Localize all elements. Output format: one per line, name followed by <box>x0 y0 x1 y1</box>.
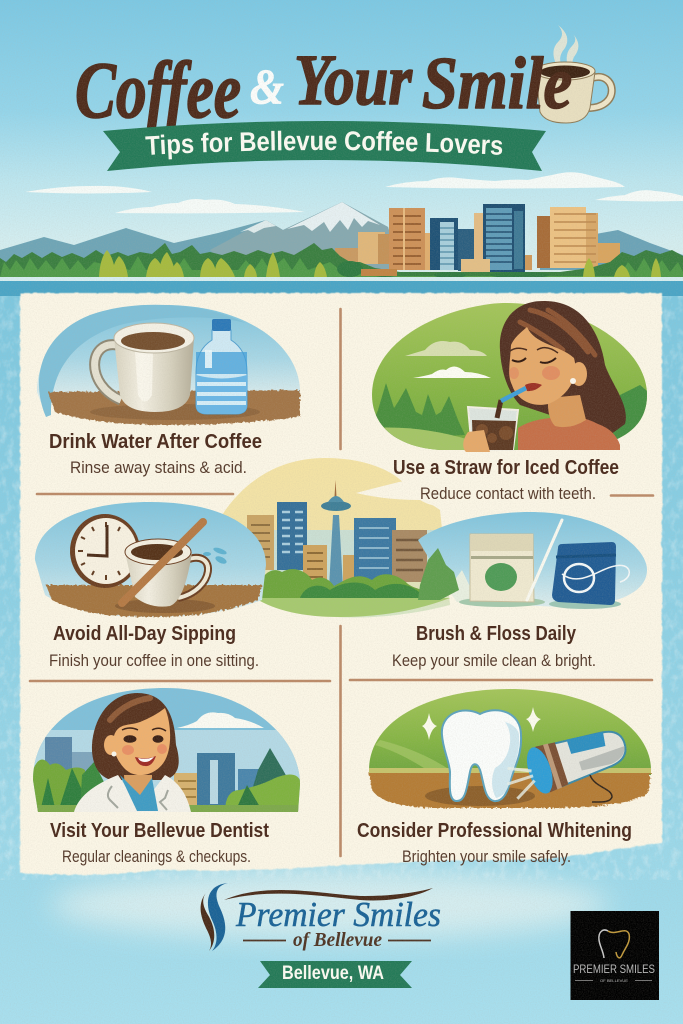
image: straw <box>372 298 652 455</box>
logo: Premier Smiles <box>201 883 441 951</box>
icon: toothpick <box>527 520 562 600</box>
icon: floss box <box>552 542 629 605</box>
image: whitening <box>365 685 655 808</box>
icon: coffee mug <box>95 323 194 412</box>
bushes <box>257 569 440 598</box>
ribbon: location <box>258 961 412 988</box>
heading: dentist: Visit Your Bellevue Dentist <box>50 820 269 842</box>
icon: iced coffee <box>463 388 526 452</box>
figure: woman with straw <box>500 301 626 450</box>
icon: coffee cup <box>535 25 612 123</box>
title: Your <box>294 40 413 120</box>
title: & <box>250 58 284 114</box>
heading: brush: Brush & Floss Daily <box>416 623 577 645</box>
dividers <box>30 309 653 856</box>
figure: dentist <box>74 693 191 812</box>
heading: straw: Use a Straw for Iced Coffee <box>393 457 619 479</box>
icon: device cord <box>590 775 612 802</box>
text: drink water: Rinse away stains & acid. <box>70 458 247 477</box>
icon: whitening pack <box>470 534 534 602</box>
city skyline <box>335 204 620 273</box>
panel <box>20 293 662 875</box>
heading: drink water: Drink Water After Coffee <box>49 431 262 453</box>
heading: clock: Avoid All-Day Sipping <box>53 623 236 645</box>
text: whitening: Brighten your smile safely. <box>402 847 571 866</box>
icon: sparkles <box>422 707 541 740</box>
buildings right <box>343 518 427 588</box>
image: dentist <box>30 685 305 815</box>
tree line <box>0 243 683 278</box>
title: Smile <box>422 43 572 125</box>
text: straw: Reduce contact with teeth. <box>420 484 596 503</box>
icon: tooth outline <box>599 930 629 958</box>
title: Coffee <box>75 47 241 135</box>
image: skyline <box>222 458 475 618</box>
icon: clock <box>70 514 140 588</box>
ribbon: location: Bellevue, WA <box>282 963 384 984</box>
logo: Premier Smiles: Premier Smiles <box>235 895 441 934</box>
icon: logo swoosh <box>201 883 433 951</box>
badge: Premier Smiles black logo: OF BELLEVUE <box>600 978 628 983</box>
logo: Premier Smiles: of Bellevue <box>293 929 382 951</box>
image: drink water <box>35 305 300 425</box>
icon: tooth <box>442 710 521 801</box>
badge: Premier Smiles black logo: PREMIER SMILES <box>573 962 655 976</box>
heading: whitening: Consider Professional Whitening <box>357 820 632 842</box>
text: clock: Finish your coffee in one sitting. <box>49 651 259 670</box>
text: brush: Keep your smile clean & bright. <box>392 651 596 670</box>
image: clock <box>30 500 270 620</box>
mountains <box>0 202 683 270</box>
icon: whitening device <box>499 720 632 804</box>
ribbon: subtitle: Tips for Bellevue Coffee Lovers <box>145 130 502 160</box>
ribbon: subtitle <box>103 121 546 171</box>
title <box>75 40 572 135</box>
icon: cup and stirrer <box>122 522 228 607</box>
icon: space needle <box>321 480 351 588</box>
image: brush and floss <box>415 510 650 610</box>
buildings left <box>247 502 327 587</box>
clouds <box>25 172 683 213</box>
badge: Premier Smiles black logo <box>570 911 659 1000</box>
water strip <box>0 277 683 296</box>
text: dentist: Regular cleanings & checkups. <box>62 847 251 866</box>
icon: water bottle <box>196 319 247 414</box>
